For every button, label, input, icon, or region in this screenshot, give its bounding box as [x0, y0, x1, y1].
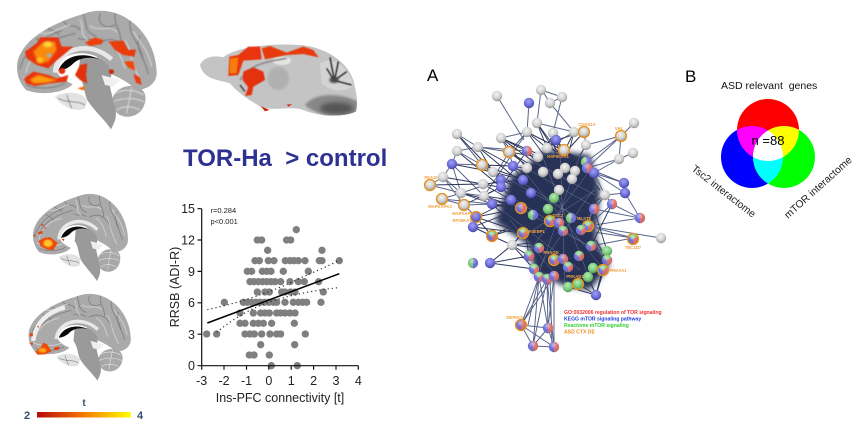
axis tick labels: 3 [333, 374, 340, 388]
axis tick labels: 6 [188, 296, 195, 310]
network nodes [424, 85, 666, 352]
mTOR interactome label: mTOR interactome [783, 155, 855, 221]
axis tick labels: 12 [181, 234, 195, 248]
network legend: ASD CTX DE [564, 330, 595, 336]
axis tick labels: 3 [188, 328, 195, 342]
network legend: GO:0032006 regulation of TOR signaling [564, 310, 662, 316]
axis tick labels: -1 [241, 374, 252, 388]
gene labels: TSC2 [553, 213, 564, 218]
gene labels: CDKN1A [578, 122, 596, 127]
axis tick labels: -2 [218, 374, 230, 388]
gene labels: EIF4EBP1 [525, 229, 546, 234]
protein interaction network [424, 85, 666, 352]
axis tick labels: 1 [288, 374, 295, 388]
gene labels: PRKAB1 [566, 274, 584, 279]
venn diagram title: ASD relevant genes [721, 80, 817, 92]
brain: mouse sagittal with activation [200, 44, 357, 116]
brain: small human sagittal 1 [33, 194, 128, 281]
axis tick labels: 4 [355, 374, 362, 388]
gene labels: DEPDC5 [506, 315, 524, 320]
y axis title: RRSB (ADI-R) [168, 247, 182, 327]
colour bar legend: t [82, 398, 86, 409]
Tsc2 interactome label: Tsc2 interactome [689, 164, 757, 220]
panel label A: A [427, 66, 439, 85]
network legend [564, 310, 662, 336]
gene labels: PEA15 [424, 175, 438, 180]
axis tick labels: 2 [310, 374, 317, 388]
correlation statistics: r=0.284 [210, 206, 236, 215]
panel label B: B [685, 67, 696, 86]
scatter plot: p<0.001 [210, 217, 238, 226]
network legend: Reactome mTOR signaling [564, 323, 629, 329]
title: TOR-Ha > control [183, 145, 387, 172]
axis tick labels: -3 [196, 374, 207, 388]
axis tick labels: 9 [188, 265, 195, 279]
gene labels: MAPKAPK3 [428, 204, 452, 209]
axis tick labels: 0 [265, 374, 272, 388]
gene labels: TBC1D7 [625, 245, 642, 250]
axes [198, 209, 358, 370]
data points [203, 226, 343, 369]
network edges [430, 90, 661, 347]
brain: large human sagittal with activation [17, 11, 157, 129]
gene labels: HSP90AA1 [547, 154, 569, 159]
gene labels [424, 122, 642, 320]
scatter plot [168, 202, 362, 405]
gene labels: RPS6KA1 [452, 218, 472, 223]
venn diagram [721, 99, 815, 188]
axis tick labels: 0 [188, 359, 195, 373]
axis tick labels: 15 [181, 202, 195, 216]
x axis title: Ins-PFC connectivity [t] [216, 391, 344, 405]
network legend: KEGG mTOR signaling pathway [564, 316, 641, 322]
colour bar legend: 4 [137, 410, 144, 422]
gene labels: VHL [615, 126, 624, 131]
gene labels: MLST8 [577, 216, 592, 221]
gene labels: MAPKAPK2 [452, 211, 476, 216]
colour bar legend: 2 [24, 410, 30, 422]
gene labels: RRAGD [543, 250, 559, 255]
colour bar legend [24, 398, 144, 422]
gene labels: PRKAA1 [609, 268, 627, 273]
venn count: n =88 [752, 133, 784, 148]
brain: small human sagittal 2 [29, 294, 131, 381]
axis tick labels [181, 202, 362, 388]
activation clusters [24, 37, 142, 91]
